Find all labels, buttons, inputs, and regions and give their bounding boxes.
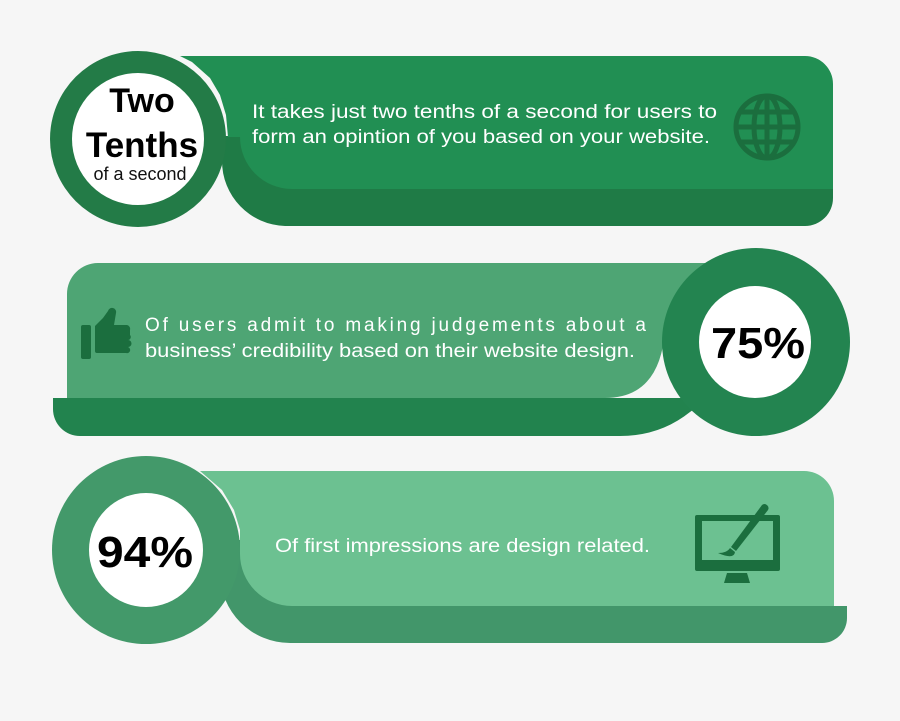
bar 2 dark band (53, 398, 700, 436)
heading: two tenths: of a second (93, 164, 187, 184)
bar 1 light face (180, 56, 833, 189)
ring 3 (52, 456, 240, 644)
stat: 94%: 94% (97, 528, 193, 577)
panel: 94% (52, 456, 847, 644)
text block 1 (252, 102, 717, 148)
bar 3 light face (200, 471, 834, 606)
bar 3 dark band (220, 540, 847, 643)
ring 1 (50, 51, 226, 227)
text block 3: Of first impressions are design related. (275, 536, 650, 557)
stat: 75%: 75% (711, 319, 805, 368)
text block 2: business’ credibility based on their website design. (145, 341, 635, 362)
heading: two tenths: Two (109, 82, 175, 120)
text block 2: Of users admit to making judgements about a (145, 315, 646, 336)
text block 2 (145, 315, 646, 362)
bar 1 dark band right (800, 189, 833, 226)
text block 1: form an opintion of you based on your website. (252, 127, 710, 148)
bar 1 dark base (222, 136, 820, 226)
panel: 75% (53, 248, 850, 436)
heading: two tenths: Tenths (86, 126, 198, 165)
bar 2 light face (67, 263, 730, 398)
icon: monitor with brush (695, 504, 780, 583)
panel: two tenths (50, 51, 833, 227)
text block 1: It takes just two tenths of a second for users to (252, 102, 717, 123)
ring 2 (662, 248, 850, 436)
heading: two tenths (86, 82, 198, 184)
icon: globe (736, 96, 798, 158)
icon: thumbs up (81, 308, 132, 359)
